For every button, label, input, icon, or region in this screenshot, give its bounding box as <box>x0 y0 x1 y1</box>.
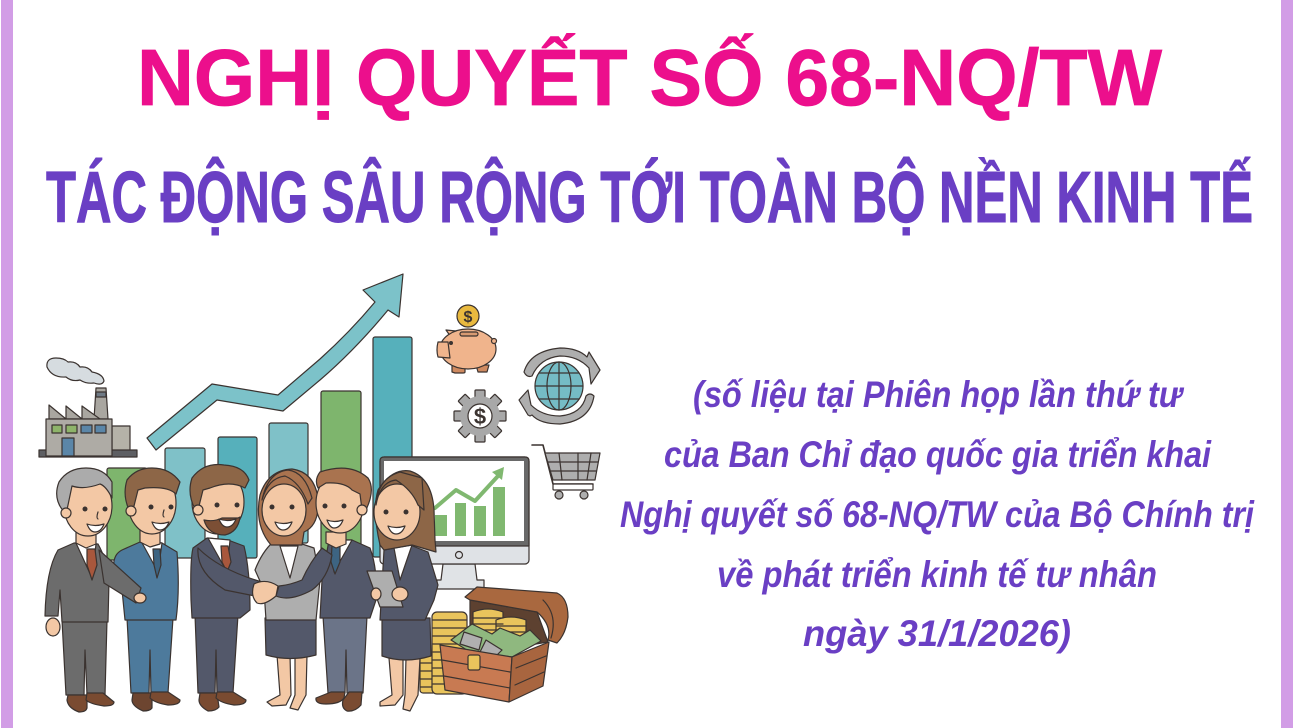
person: bearded man in dark suit <box>190 465 262 711</box>
title: NGHỊ QUYẾT SỐ 68-NQ/TW <box>137 33 1162 122</box>
icon: piggy bank: $ <box>464 309 473 326</box>
icon: globe with arrows <box>519 348 600 424</box>
source note: của Ban Chỉ đạo quốc gia triển khai <box>664 434 1212 475</box>
arrow: growth <box>147 274 403 450</box>
icon: shopping cart <box>532 445 600 499</box>
left border bar <box>1 0 13 728</box>
icon: computer monitor <box>380 457 529 589</box>
person: man in blue suit <box>114 468 180 711</box>
source note: về phát triển kinh tế tư nhân <box>717 554 1157 595</box>
person: woman in grey jacket <box>255 469 320 710</box>
person: older man in grey suit <box>45 468 146 712</box>
person: man in grey-blue suit <box>253 468 376 711</box>
icon: gear with dollar <box>454 390 506 442</box>
bar chart <box>107 337 412 560</box>
icon: coin stack <box>420 612 467 694</box>
icon: treasure chest <box>440 587 568 702</box>
source note <box>620 374 1255 654</box>
icon: factory <box>39 358 137 457</box>
illustration: economy and business people <box>39 274 600 712</box>
icon: gear with dollar: $ <box>474 404 486 429</box>
person: woman with tablet <box>367 471 438 711</box>
right border bar <box>1281 0 1293 728</box>
source note: ngày 31/1/2026) <box>803 613 1071 654</box>
icon: piggy bank <box>437 305 496 373</box>
source note: (số liệu tại Phiên họp lần thứ tư <box>693 374 1184 415</box>
handshake <box>253 581 278 604</box>
